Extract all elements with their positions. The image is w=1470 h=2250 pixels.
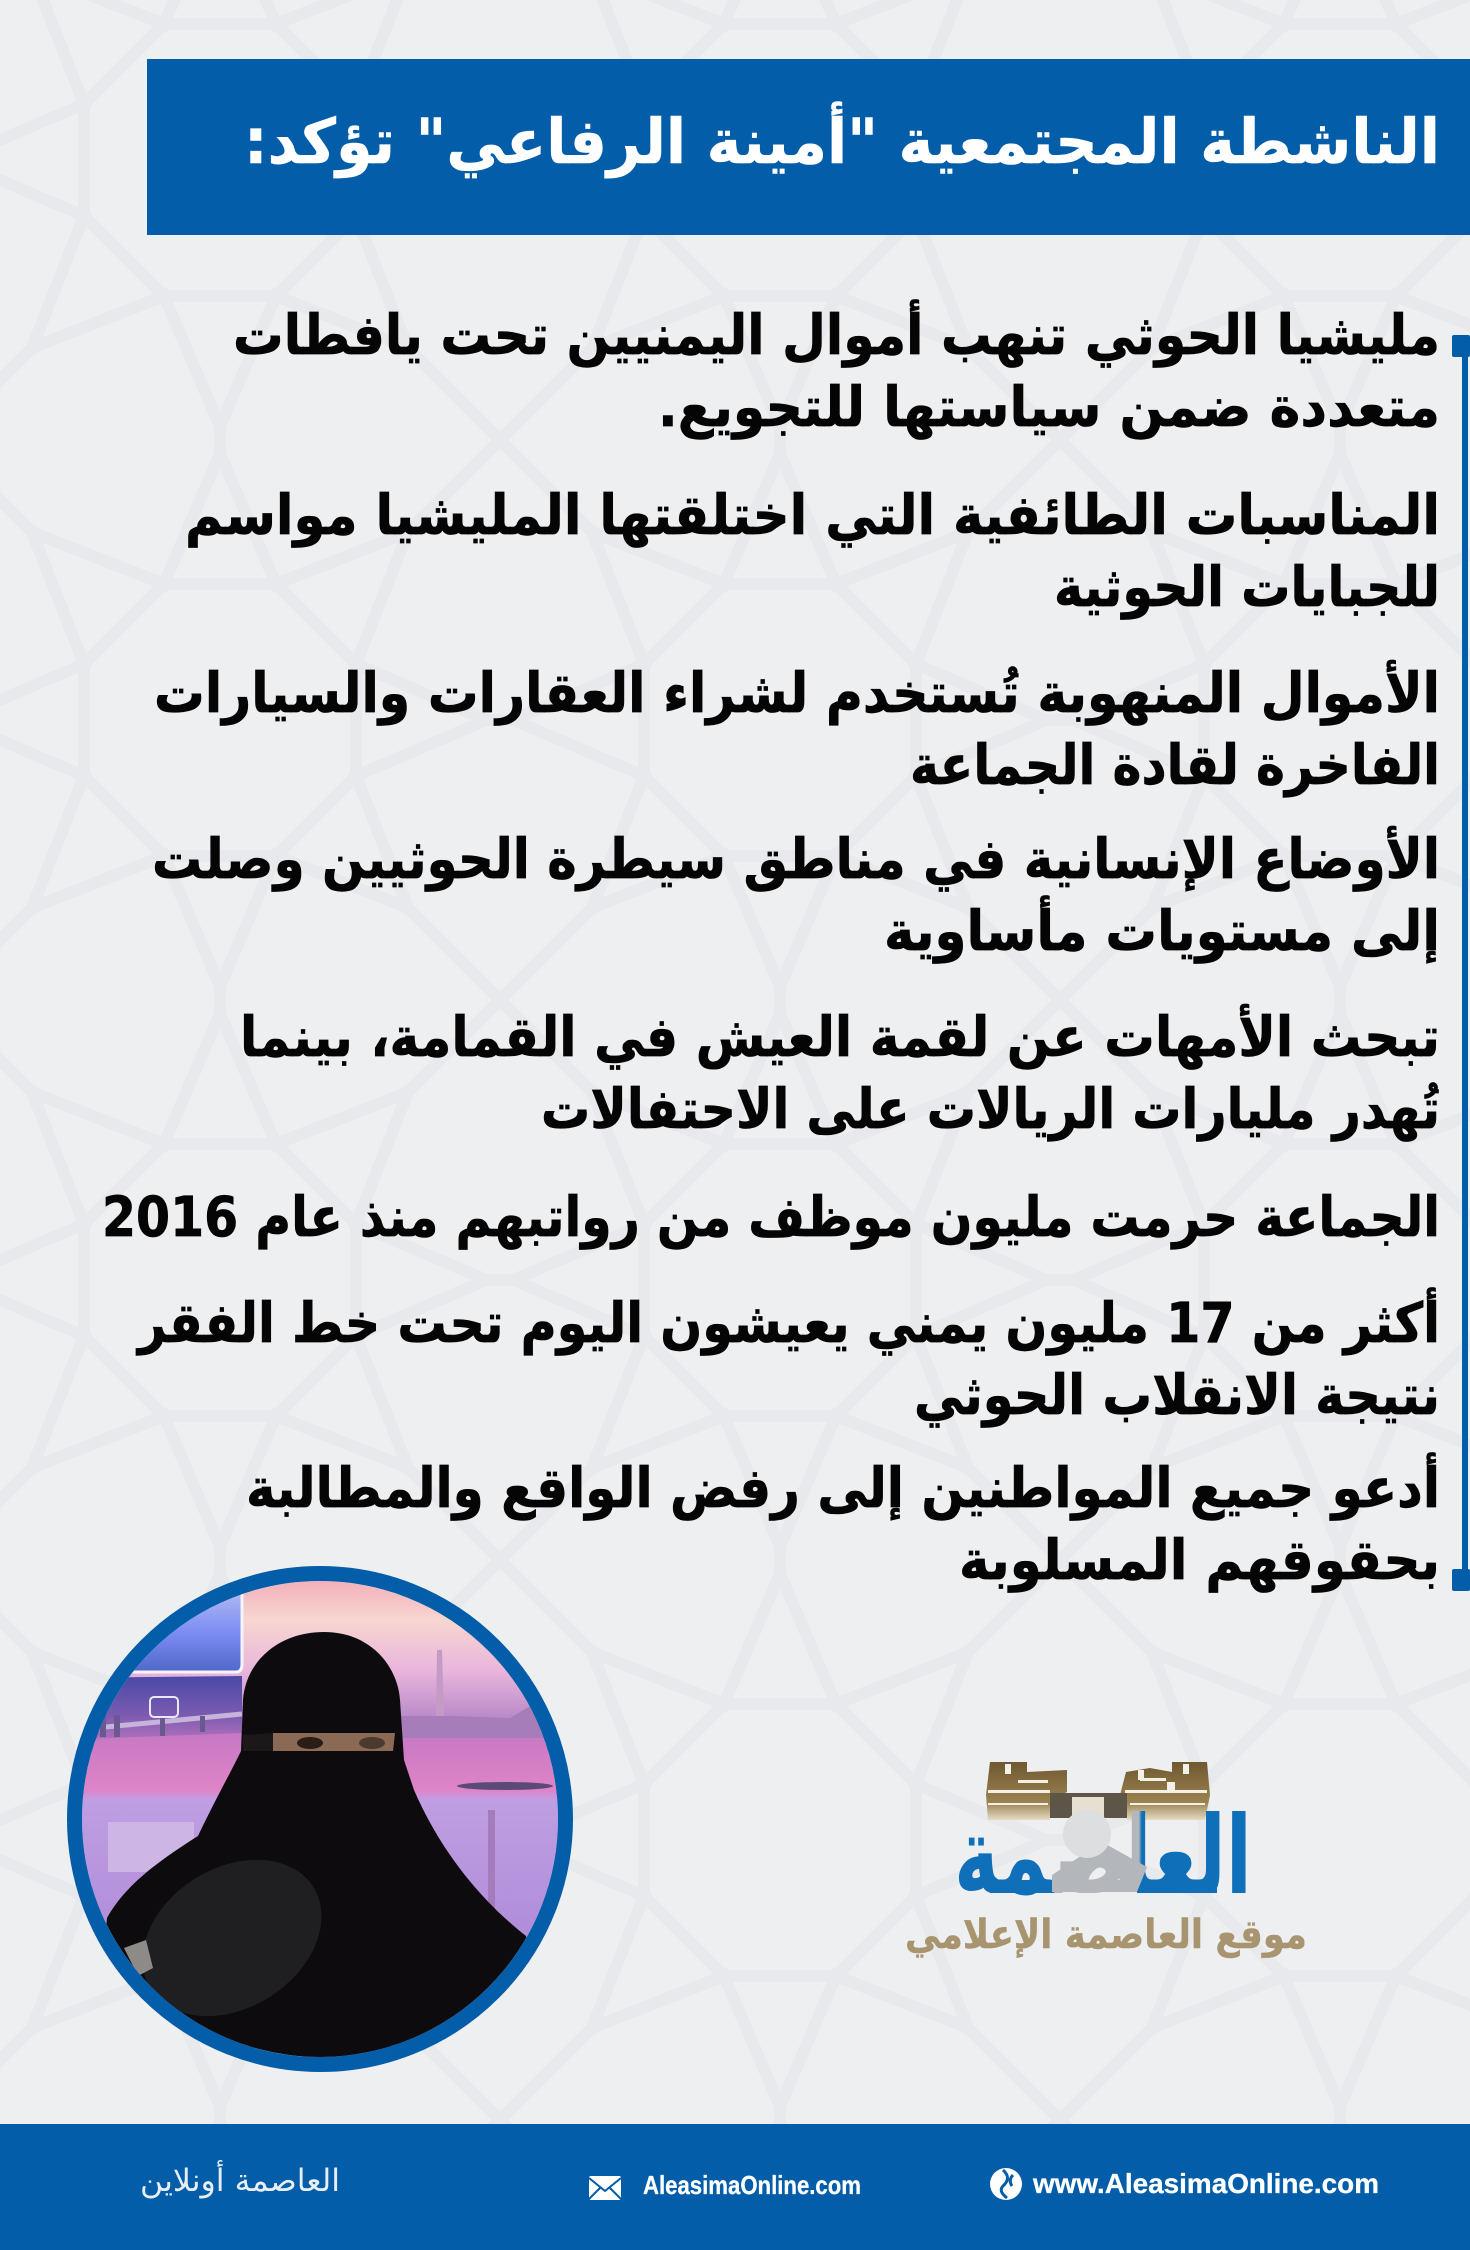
black garment figure [106,1632,526,2057]
icon: globe [1063,1810,1111,1858]
statement 7: أكثر من 17 مليون يمني يعيشون اليوم تحت خط الفقر [135,1287,1440,1356]
logo wordmark: العاصمة [954,1794,1252,1919]
statement 7 [135,1287,1440,1428]
title banner [147,59,1470,235]
footer brand name: العاصمة أونلاين [140,2160,340,2199]
eye slit [273,1733,395,1751]
side rule with end caps [1452,335,1470,1591]
icon: mail [589,2176,621,2200]
statements list [102,299,1440,1593]
email text: AleasimaOnline.com [643,2170,861,2200]
logo caption: موقع العاصمة الإعلامي [905,1912,1307,1958]
statement 8: بحقوقهم المسلوبة [959,1528,1440,1593]
statement 1: متعددة ضمن سياستها للتجويع. [658,375,1440,440]
statement 4: إلى مستويات مأساوية [884,895,1440,964]
statement 1 [233,299,1440,440]
statement 8 [246,1452,1440,1593]
title text: الناشطة المجتمعية "أمينة الرفاعي" تؤكد: [244,101,1440,178]
icon: old city buildings [986,1762,1210,1820]
icon: globe [990,2168,1022,2200]
statement 4 [152,826,1440,964]
microphone [124,1860,322,2016]
statement 3 [154,660,1440,797]
website text: www.AleasimaOnline.com [1032,2168,1379,2199]
footer bar [0,2124,1470,2250]
portrait photo in circular frame [60,1560,570,2100]
statement 2 [185,483,1440,620]
statement 5 [240,1004,1440,1142]
logo: Al-Aasima [905,1762,1307,1958]
